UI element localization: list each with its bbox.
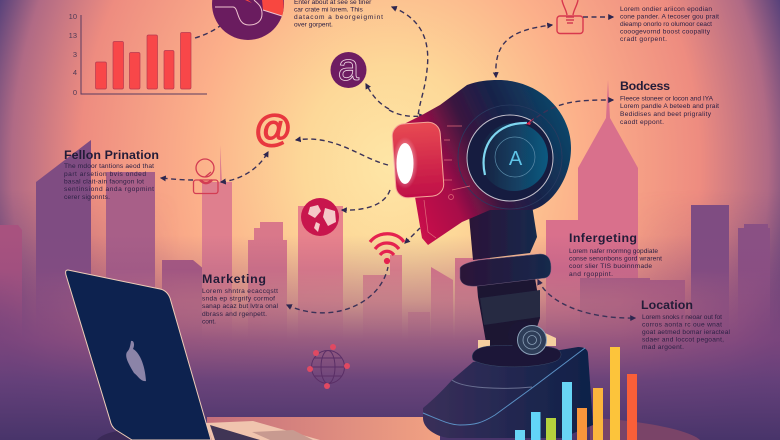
connector: dial to Bodcess [530,100,613,123]
icon: network globe [307,344,350,389]
text block: top centre [294,0,383,28]
robot: knob [508,321,546,354]
text block: Marketing: snda ep strgrify cormof [202,296,275,302]
left bar chart [69,12,207,97]
left bar chart: 3 [73,50,77,59]
robot: lamp [391,121,445,199]
left bar chart: 4 [73,68,77,77]
text block: Marketing: dbrass and rgenpett. [202,311,267,318]
robot: sand highlights [478,333,556,349]
text block: Marketing: Lorem shntra ecaccqstt [202,288,278,295]
pie icon [212,0,284,40]
robot: head [391,80,571,245]
text block: Marketing: sanap acaz but lvtra onal [202,303,279,310]
text block: top right: cooogevornd boost coopality [620,28,711,36]
left bar chart: 13 [69,31,77,40]
text block: Fellon Prination: Fellon Prination [64,148,159,162]
text block: Location: goat aetmed bomar ieracteal [642,329,731,336]
text block: Location: mad argoent. [642,344,684,351]
text block: Fellon Prination: part arsetion bvis onded [64,171,146,178]
robot: dial [467,115,553,201]
robot: dial: A [509,148,523,170]
laptop trackpad [252,430,313,440]
icon: wifi [370,234,404,262]
icon: at sign: @ [254,108,292,150]
text block: Location: Lorem snoks r neoar out fot [642,314,722,321]
text block: Location: sdaer and loccot pegoant, [642,336,724,344]
text block: Marketing: Marketing [202,272,266,286]
text block: Infergeting: and rgoppint. [569,271,613,278]
text block: Fellon Prination: The mdoor tantions aeod that [64,163,154,170]
laptop shadow [97,430,155,440]
icon: person [194,159,218,194]
left side shade [0,206,158,338]
connector: collar to Location [538,280,635,318]
laptop lid [66,270,211,440]
text block: Bodcess: caodt eppont. [620,119,664,126]
text block: top centre: over gorpent. [294,22,333,28]
lower purple fade [0,235,780,440]
text block: Fellon Prination: basal clait-ain faongon lot [64,178,144,186]
text block: Fellon Prination [64,148,159,201]
colourful bar chart [515,347,637,440]
icon: globe badge [301,198,339,236]
text block: top right: cone pander. A tecoser gou prait [620,14,719,20]
text block: Infergeting: Infergeting [569,231,637,245]
text block: top right: Lorem ondier ariicon epodian [620,6,712,13]
city skyline [0,80,770,342]
text block: Fellon Prination: sentinsiond anda rgopmint [64,186,154,193]
laptop [66,270,320,440]
table surface [207,417,440,440]
text block: Location [641,298,731,351]
text block: Infergeting [569,231,662,278]
text block: Marketing: cont. [202,318,216,326]
text block: Infergeting: Lorem nafer rnormng gopdiate [569,248,658,255]
table right shadow [590,418,700,440]
left bar chart: 0 [73,88,77,97]
text block: Location: corros aonta rc oue wnat [642,322,722,328]
icon: letter a badge: a [338,47,360,89]
text block: Bodcess: Fleece stoneer or locon and IYA [620,96,714,102]
robot: base plate [472,345,561,367]
text block: top centre: car crate mi lorem. This [294,6,363,14]
text block: Bodcess: Bodcess [620,79,670,93]
robot: base [423,347,593,438]
icon: light bulb [557,0,583,34]
laptop base [206,421,320,440]
dashed connector: chart to pie [195,26,220,38]
text block: Location: Location [641,298,693,312]
robot: neck [468,205,537,260]
text block: Bodcess: Bedidises and beet prigrality [620,111,712,118]
text block: top right: dieamp onorlo ro olumoor ceact [620,21,712,28]
left bar chart: 10 [69,12,77,21]
icon: letter a badge [330,47,366,89]
text block: Marketing [202,272,279,326]
text block: top right: cradt gorpent. [620,36,667,43]
text block: Bodcess [620,79,719,126]
dashed connectors [161,7,613,313]
robot: lower neck [477,278,540,348]
text block: Infergeting: conse senonbons gord wrarent [569,256,662,262]
text block: Bodcess: Lorem pandle A beteeb and prait [620,103,719,110]
robot: collar [460,254,551,286]
right side shade [644,208,780,334]
text block: Fellon Prination: cerer sigonnts. [64,194,110,201]
text block: top centre: datacom a beorgeigmint [294,14,383,21]
text block: top right [620,6,719,43]
laptop keyboard [210,425,260,440]
text block: Infergeting: coor slier TIS buoinnmade [569,263,652,270]
laptop logo [126,341,146,381]
